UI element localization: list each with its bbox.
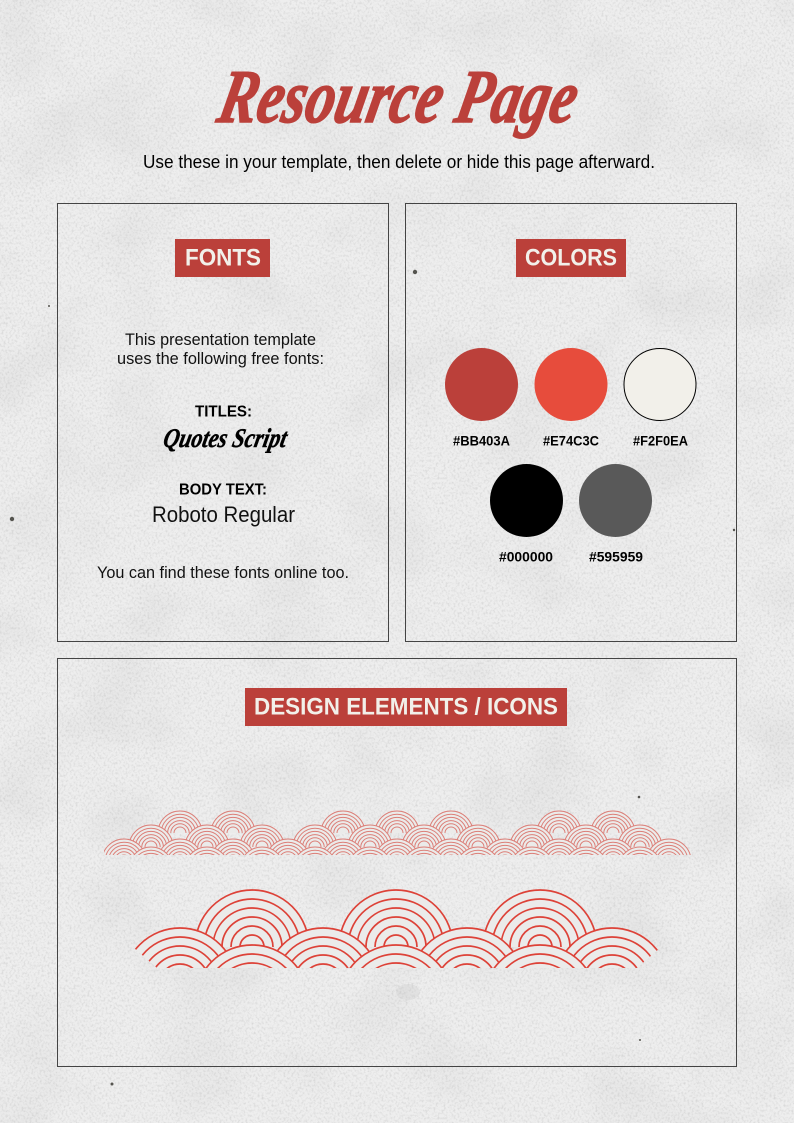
body font label: BODY TEXT: [179,482,267,498]
heading: colors [516,239,626,277]
title: Resource Page [211,55,586,139]
swatch: BB403A [445,348,518,448]
fonts intro text: This presentation template [125,331,316,349]
panel: design elements [58,658,736,1066]
large wave pattern [134,889,658,968]
fonts intro text [117,331,324,368]
swatch: 000000 [490,464,563,564]
heading: fonts: FONTS [185,244,261,272]
titles font label: TITLES: [195,404,252,420]
titles font sample: Quotes Script [161,423,291,453]
panel: colors [406,204,736,642]
swatch: 595959 [579,464,652,564]
fonts closing note: You can find these fonts online too. [97,564,349,582]
fonts intro text: uses the following free fonts: [117,350,324,368]
heading: design elements: DESIGN ELEMENTS / ICONS [254,694,558,720]
swatch: F2F0EA [624,348,696,448]
swatch: E74C3C [534,348,608,448]
swatch: 000000: #000000 [499,550,553,564]
swatch: 595959: #595959 [589,550,643,564]
body font sample: Roboto Regular [152,502,295,527]
heading: fonts [175,239,270,277]
small wave pattern [104,810,691,855]
swatch: F2F0EA: #F2F0EA [633,434,688,448]
panel: fonts [58,204,388,642]
heading: design elements [245,688,567,726]
swatch: E74C3C: #E74C3C [543,434,599,448]
swatch: BB403A: #BB403A [453,434,510,448]
subtitle: Use these in your template, then delete or hide this page afterward. [143,152,655,172]
heading: colors: COLORS [525,244,617,272]
